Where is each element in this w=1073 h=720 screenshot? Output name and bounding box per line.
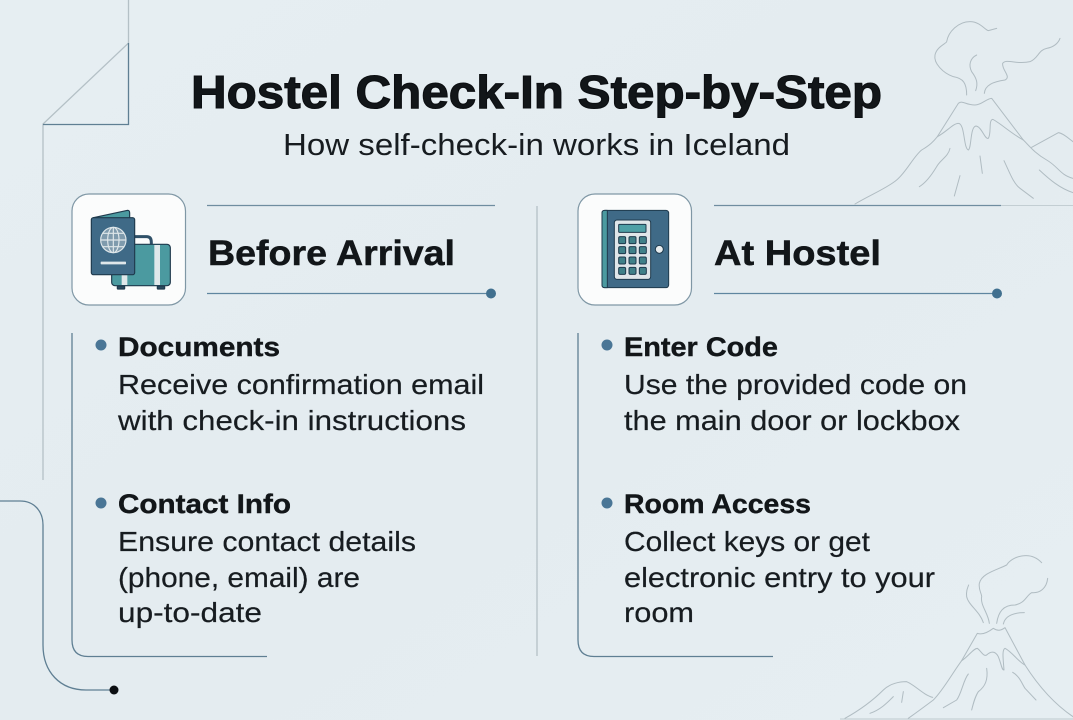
panel bracket (72, 333, 267, 656)
icon: door keypad (578, 194, 692, 305)
section heading: at hostel (714, 206, 1073, 298)
panel: before arrival (72, 194, 496, 656)
title: Hostel Check-In Step-by-Step (191, 66, 882, 118)
list item: documents: with check-in instructions (117, 405, 466, 436)
illustration: volcano top right (855, 22, 1073, 204)
list item: documents: Documents (118, 332, 280, 362)
decorative corner fold top left (43, 0, 128, 480)
panel: at hostel (578, 194, 1073, 656)
list item: enter code (602, 332, 967, 436)
list item: contact info: up-to-date (118, 597, 262, 628)
subtitle: How self-check-in works in Iceland (283, 127, 790, 162)
list item: documents (96, 332, 484, 436)
list item: room access: electronic entry to your (624, 562, 935, 593)
section heading: before arrival (207, 206, 496, 298)
list item: room access: Room Access (624, 489, 811, 519)
list item: contact info (96, 489, 416, 628)
section heading: before arrival: Before Arrival (208, 234, 455, 273)
panel bracket (578, 333, 773, 656)
connector line with end dot (0, 501, 118, 694)
centre divider (536, 206, 538, 656)
list item: contact info: (phone, email) are (118, 562, 360, 593)
illustration: volcano bottom right (845, 556, 1073, 718)
list item: contact info: Ensure contact details (118, 526, 416, 557)
list item: enter code: the main door or lockbox (624, 405, 960, 436)
section heading: at hostel: At Hostel (714, 234, 881, 273)
list item: room access (602, 489, 935, 628)
list item: enter code: Use the provided code on (624, 369, 967, 400)
icon: passport and suitcase (72, 194, 186, 305)
list item: room access: room (624, 597, 694, 628)
list item: room access: Collect keys or get (624, 526, 870, 557)
list item: contact info: Contact Info (118, 489, 291, 519)
list item: documents: Receive confirmation email (118, 369, 484, 400)
list item: enter code: Enter Code (624, 332, 778, 362)
